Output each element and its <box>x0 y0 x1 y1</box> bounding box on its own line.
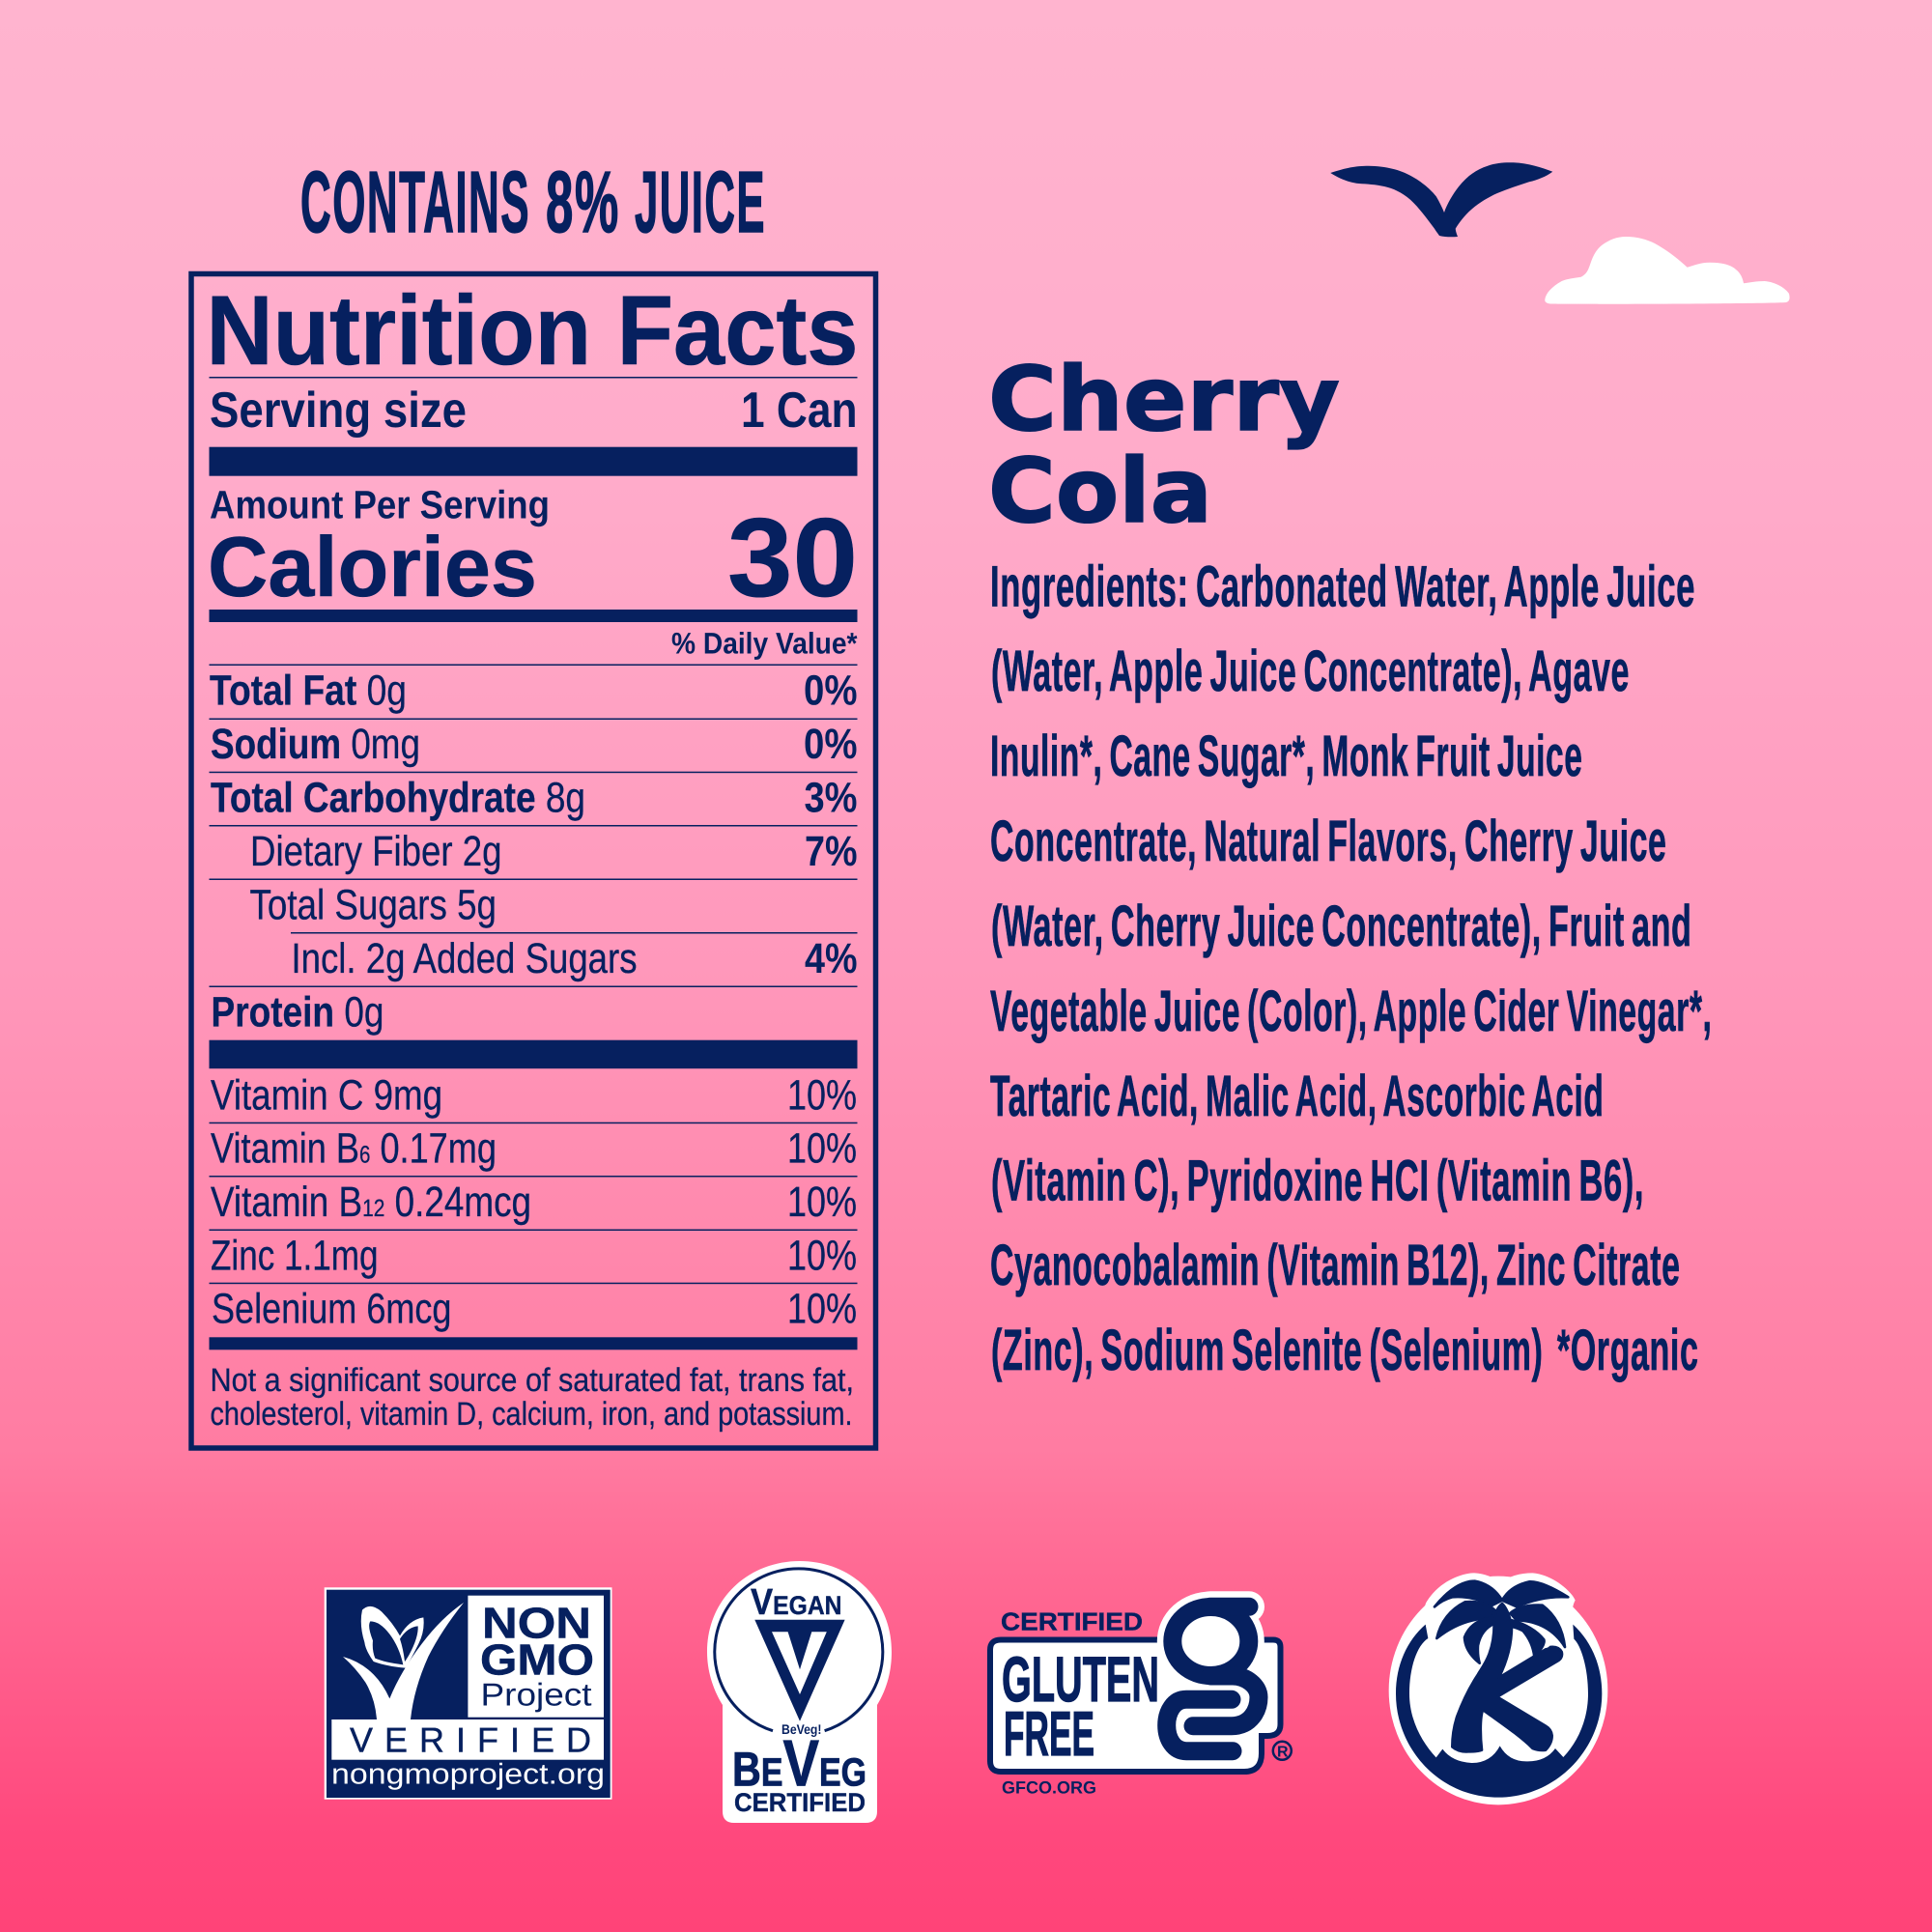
label: vegan: VEGAN <box>751 1582 842 1623</box>
label: non gmo project <box>480 1598 594 1713</box>
row: dietary fiber: Dietary Fiber 2g <box>250 828 502 875</box>
label: gluten free <box>1002 1643 1159 1769</box>
badge: non gmo project verified <box>325 1587 612 1800</box>
palm k <box>1435 1581 1568 1751</box>
white backing <box>1389 1573 1607 1804</box>
row: vitamin b12 <box>211 1179 857 1226</box>
heading: nutrition facts: Nutrition Facts <box>207 275 858 385</box>
row: total carbohydrate <box>211 775 858 821</box>
icon: bird <box>1330 162 1552 237</box>
label: nongmoproject.org: nongmoproject.org <box>331 1759 605 1791</box>
label: beveg: BEVEG <box>732 1726 867 1800</box>
text: percent daily value: % Daily Value* <box>671 626 858 661</box>
row: zinc <box>211 1232 857 1279</box>
row: serving size: 1 Can <box>741 383 858 439</box>
row: vitamin b12: 10% <box>787 1179 857 1226</box>
badge: beveg vegan certified <box>707 1561 892 1823</box>
row: dietary fiber <box>250 828 858 875</box>
row: selenium: Selenium 6mcg <box>212 1286 452 1333</box>
row: calories: Calories <box>208 519 537 614</box>
row: vitamin b6 <box>211 1124 857 1173</box>
row: vitamin b12: Vitamin B12 0.24mcg <box>211 1179 531 1226</box>
panel: nutrition facts <box>191 274 875 1448</box>
row: total carbohydrate: Total Carbohydrate 8g <box>211 775 585 821</box>
row: total fat: 0% <box>804 667 858 715</box>
label: beveg small: BeVeg! <box>781 1721 821 1737</box>
row: total carbohydrate: 3% <box>804 775 858 821</box>
icon: registered mark <box>1273 1742 1292 1760</box>
label: non gmo project: Project <box>481 1677 591 1713</box>
ring and sea <box>1396 1625 1602 1798</box>
row: added sugars: Incl. 2g Added Sugars <box>292 935 638 982</box>
label: gfco.org: GFCO.ORG <box>1002 1778 1096 1798</box>
label: certified: CERTIFIED <box>1001 1606 1143 1635</box>
row: sodium <box>211 721 858 768</box>
row: total fat: Total Fat 0g <box>210 667 407 715</box>
row: total fat <box>210 667 858 715</box>
row: dietary fiber: 7% <box>805 828 858 875</box>
label: certified: CERTIFIED <box>734 1788 866 1817</box>
text block: ingredients <box>990 554 1712 1382</box>
title: cherry cola: Cola <box>988 440 1212 543</box>
row: vitamin c <box>211 1071 857 1119</box>
icon: cloud <box>1545 237 1790 304</box>
text: amount per serving: Amount Per Serving <box>210 483 550 527</box>
footnote <box>211 1362 854 1433</box>
row: serving size <box>210 383 858 439</box>
footnote: cholesterol, vitamin D, calcium, iron, and potassium. <box>211 1396 852 1433</box>
badge: certified gluten free <box>990 1606 1292 1798</box>
row: protein: Protein 0g <box>211 989 384 1036</box>
row: zinc: Zinc 1.1mg <box>211 1232 379 1279</box>
row: calories <box>208 495 858 620</box>
row: vitamin c: Vitamin C 9mg <box>211 1071 442 1119</box>
label: gluten free: FREE <box>1004 1698 1094 1769</box>
row: sodium: 0% <box>804 721 858 768</box>
row: calories: 30 <box>727 495 858 620</box>
label: verified: VERIFIED <box>350 1719 591 1759</box>
row: selenium: 10% <box>787 1286 857 1333</box>
row: sodium: Sodium 0mg <box>211 721 420 768</box>
label: non gmo project: NON <box>482 1598 591 1648</box>
row: vitamin b6: Vitamin B6 0.17mg <box>211 1124 497 1173</box>
label: gluten free: GLUTEN <box>1002 1643 1159 1715</box>
heading: contains 8% juice: 8% <box>546 155 620 251</box>
icon: registered mark: R <box>1277 1745 1289 1760</box>
row: zinc: 10% <box>787 1232 857 1279</box>
icon: butterfly and check <box>343 1603 464 1719</box>
row: selenium <box>212 1286 857 1333</box>
row: vitamin b6: 10% <box>787 1124 857 1173</box>
title: cherry cola: Cherry <box>988 348 1340 451</box>
row: total sugars: Total Sugars 5g <box>249 881 497 929</box>
text: JUICE <box>635 155 766 251</box>
row: vitamin c: 10% <box>787 1071 857 1119</box>
row: serving size: Serving size <box>210 383 467 439</box>
heading: contains 8% juice: CONTAINS <box>300 155 530 251</box>
label: non gmo project: GMO <box>480 1634 594 1685</box>
icon: v triangle <box>754 1620 845 1721</box>
icon: letter g <box>1167 1606 1259 1751</box>
footnote: Not a significant source of saturated fat, trans fat, <box>211 1362 854 1399</box>
row: added sugars: 4% <box>805 935 858 982</box>
title: cherry cola <box>988 348 1340 543</box>
badge: palm tree k logo <box>1389 1573 1607 1804</box>
